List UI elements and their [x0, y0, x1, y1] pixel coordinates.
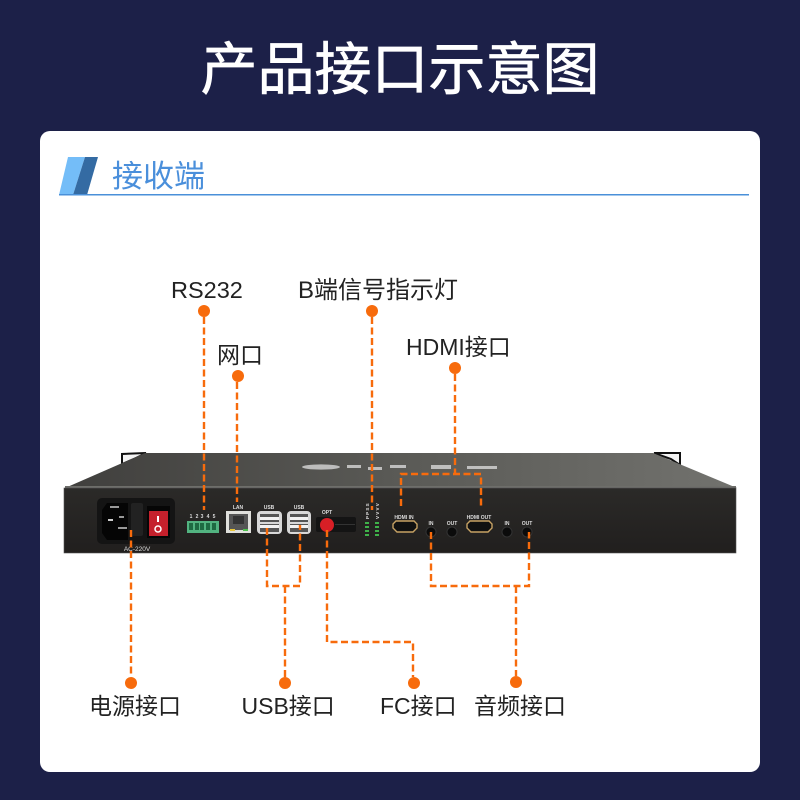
section heading: receiver: 接收端 — [112, 159, 205, 194]
power module — [97, 498, 175, 553]
RS232 terminal: 2 — [196, 514, 199, 520]
title: 产品接口示意图 — [200, 38, 600, 102]
callout: HDMI — [401, 334, 511, 506]
RS232 terminal: 5 — [213, 514, 216, 520]
indicator lights — [365, 503, 380, 536]
callout: FC: FC接口 — [380, 693, 457, 719]
audio jacks: OUT — [447, 521, 457, 527]
audio jacks: IN — [504, 521, 510, 527]
HDMI ports: HDMI OUT — [467, 515, 491, 521]
callout: power: 电源接口 — [89, 693, 181, 719]
callout: HDMI: HDMI接口 — [406, 334, 511, 360]
callout: network port — [217, 342, 263, 502]
HDMI ports: HDMI IN — [394, 515, 414, 521]
audio jacks: OUT — [522, 521, 532, 527]
callout: network port: 网口 — [217, 342, 263, 368]
callout: RS232 — [171, 277, 243, 510]
LAN port — [226, 505, 251, 533]
indicator lights: V V V V — [375, 503, 380, 519]
LAN port: LAN — [233, 505, 244, 511]
callout: RS232: RS232 — [171, 277, 243, 303]
callout: B-side indicator lights — [298, 277, 458, 510]
FC optical port: OPT — [322, 510, 332, 516]
HDMI ports — [393, 515, 492, 532]
device top face — [65, 453, 737, 488]
RS232 terminal: 1 — [190, 514, 193, 520]
icon: left rack ear — [122, 453, 146, 464]
RS232 terminal: 3 — [201, 514, 204, 520]
RS232 terminal: 4 — [207, 514, 210, 520]
icon: right rack ear — [654, 453, 680, 465]
USB ports — [257, 505, 311, 534]
callout: FC — [327, 530, 457, 719]
panel: receiver card — [40, 131, 760, 772]
callout: USB: USB接口 — [242, 693, 335, 719]
section heading: receiver — [59, 157, 749, 196]
indicator lights: P P S S — [365, 503, 370, 519]
callout: audio — [431, 532, 566, 719]
audio jacks — [426, 521, 532, 537]
FC optical port — [316, 510, 356, 532]
callout: USB — [242, 525, 335, 719]
audio jacks: IN — [428, 521, 434, 527]
device front face — [64, 488, 736, 553]
device logo — [302, 464, 497, 470]
callout: power — [89, 530, 181, 719]
USB ports: USB — [294, 505, 305, 511]
device illustration — [64, 453, 737, 553]
RS232 terminal — [187, 514, 219, 533]
USB ports: USB — [264, 505, 275, 511]
callout: audio: 音频接口 — [474, 693, 566, 719]
power module: AC-220V — [124, 546, 151, 553]
callout: B-side indicator lights: B端信号指示灯 — [298, 277, 458, 304]
